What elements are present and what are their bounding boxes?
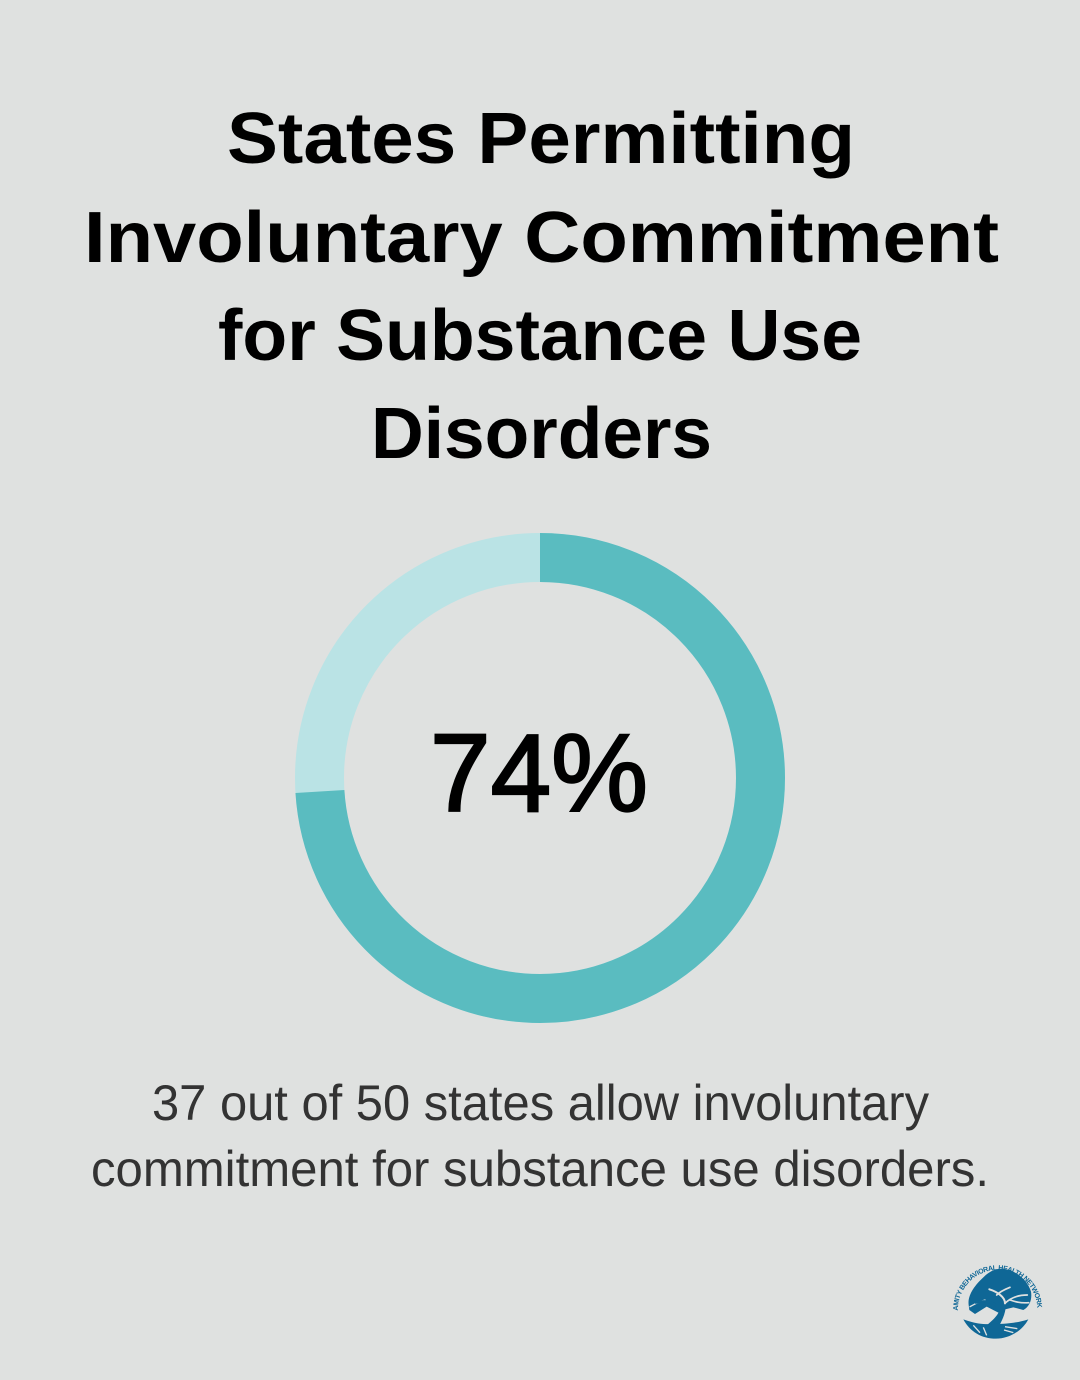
description text	[91, 1075, 989, 1197]
title: States Permitting	[227, 99, 855, 179]
description text: commitment for substance use disorders.	[91, 1141, 989, 1197]
logo: Amity Behavioral Health Network tree	[953, 1265, 1042, 1339]
donut value: 74%	[430, 712, 648, 835]
logo branches	[970, 1287, 1029, 1307]
donut chart: 74 percent	[320, 558, 760, 998]
logo canopy	[969, 1269, 1031, 1314]
title: Disorders	[371, 394, 712, 474]
logo trunk	[985, 1305, 1006, 1327]
description text: 37 out of 50 states allow involuntary	[152, 1075, 929, 1131]
title: for Substance Use	[218, 296, 862, 376]
logo arc text: AMITY BEHAVIORAL HEALTH NETWORK	[953, 1265, 1042, 1310]
title	[84, 99, 999, 474]
title: Involuntary Commitment	[84, 198, 999, 278]
logo roots	[963, 1319, 1028, 1339]
